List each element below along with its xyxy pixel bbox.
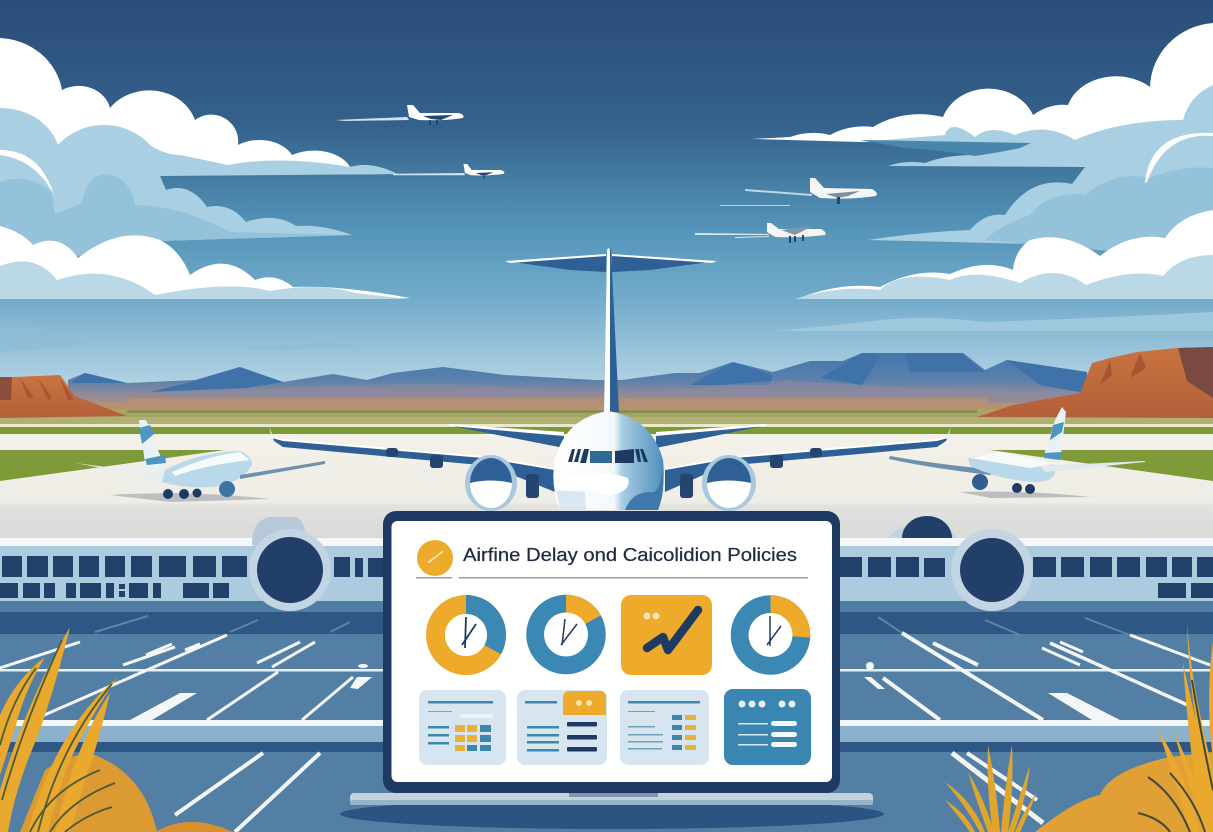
plane: lower right bbox=[695, 223, 826, 243]
cockpit windows bbox=[568, 449, 648, 463]
clouds: right bbox=[752, 23, 1213, 331]
donut clock 3 bbox=[740, 604, 801, 666]
mesa: left bbox=[0, 375, 127, 418]
terminal building bbox=[0, 516, 1213, 634]
title icon bbox=[417, 540, 453, 576]
status tile with checkmark bbox=[621, 595, 712, 675]
policy card 4 bbox=[724, 689, 811, 765]
plane: lower left bbox=[393, 164, 504, 179]
plane: upper right bbox=[720, 178, 877, 206]
rear engine right bbox=[888, 516, 1033, 611]
laptop screen bbox=[392, 521, 832, 782]
policy card 1 bbox=[419, 690, 506, 765]
sky background bbox=[0, 0, 1213, 420]
orange bushes and grass: left bbox=[0, 627, 233, 832]
laptop base bbox=[350, 793, 873, 805]
airplanes in the sky bbox=[335, 105, 877, 243]
plane: parked right bbox=[889, 407, 1145, 498]
policy card 3 bbox=[620, 690, 709, 765]
laptop bbox=[340, 511, 884, 829]
terminal windows bbox=[0, 556, 1213, 598]
tail fin bbox=[505, 248, 717, 412]
mountain range bbox=[68, 353, 1087, 405]
right engine bbox=[702, 455, 756, 511]
donut clock 2 bbox=[536, 604, 596, 665]
plane: parked left bbox=[75, 420, 325, 502]
laptop frame bbox=[383, 511, 840, 793]
policy card 2 bbox=[517, 690, 607, 765]
clouds: left bbox=[0, 38, 410, 352]
left engine bbox=[465, 455, 517, 511]
tarmac with runway markings bbox=[0, 616, 1213, 832]
laptop shadow bbox=[340, 799, 884, 829]
plane: upper left bbox=[335, 105, 464, 125]
grass patches bbox=[0, 450, 1213, 481]
donut clock 1 bbox=[436, 604, 496, 666]
title rule bbox=[416, 577, 808, 578]
rear engine left bbox=[249, 517, 331, 611]
orange bushes and grass: right bbox=[945, 623, 1213, 832]
fuselage bbox=[553, 411, 664, 510]
mesa: right bbox=[977, 347, 1213, 418]
horizon ground bands bbox=[0, 403, 1213, 434]
title: Airfine Delay ond Caicolidion Policies bbox=[463, 545, 797, 565]
right wing bbox=[656, 424, 951, 498]
main airliner bbox=[269, 248, 951, 511]
left wing bbox=[269, 424, 564, 498]
apron concrete bbox=[0, 434, 1213, 539]
